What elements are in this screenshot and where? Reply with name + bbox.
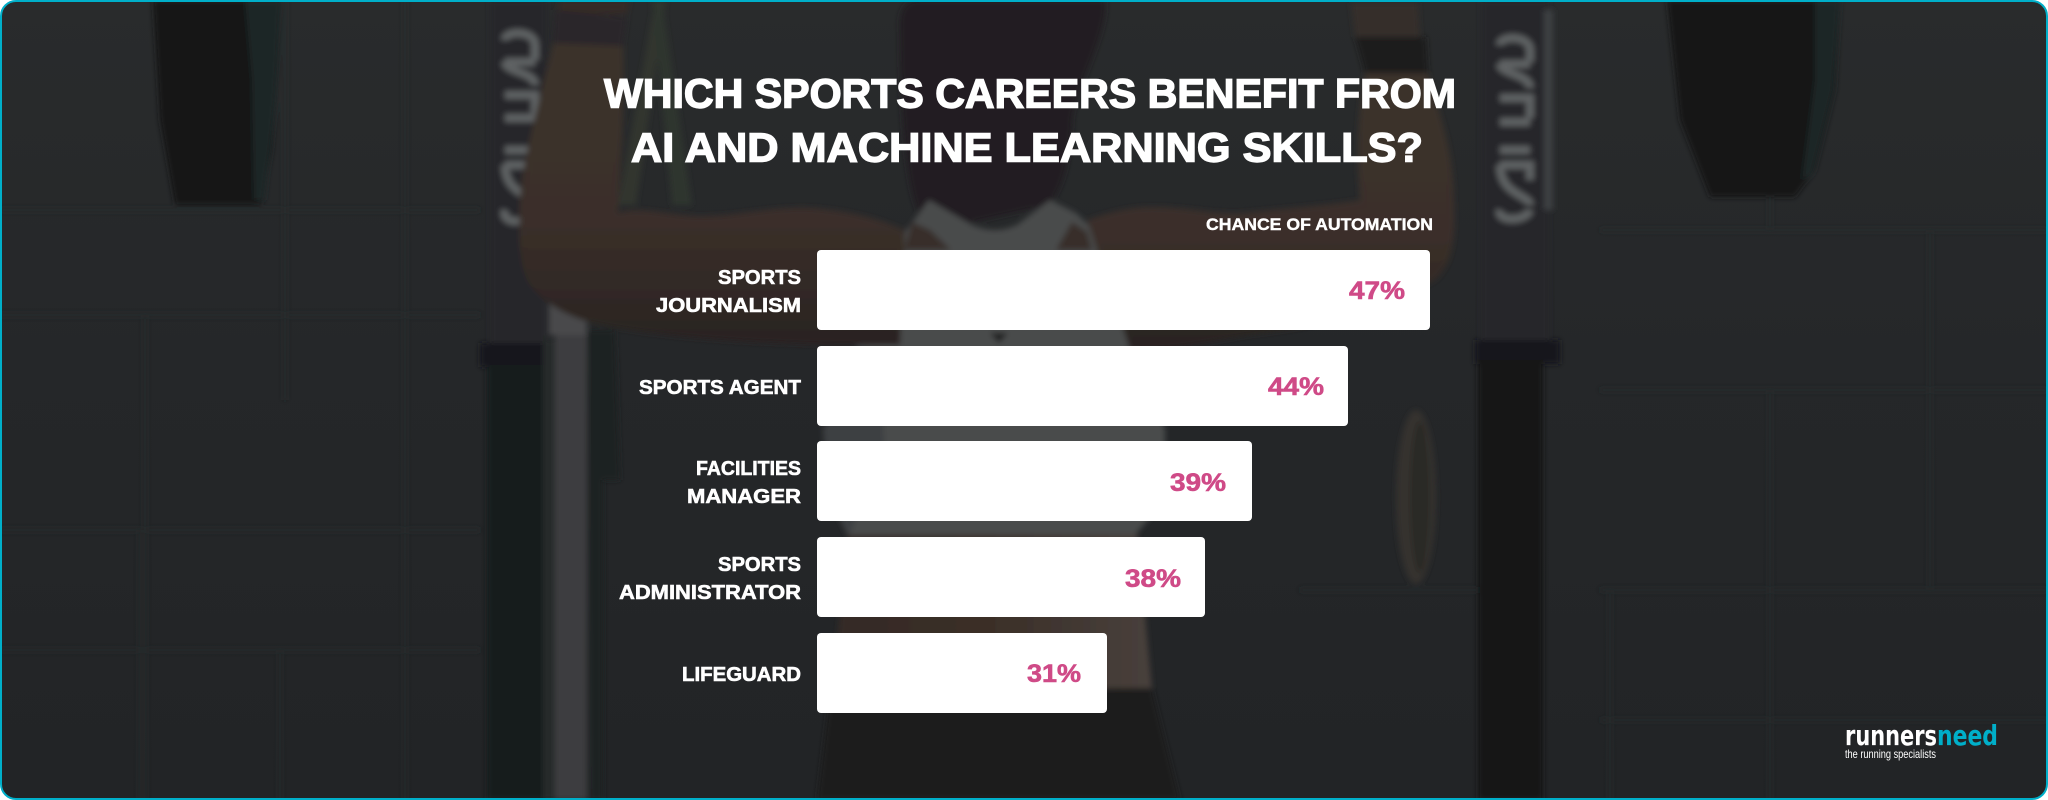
left rack <box>480 0 620 800</box>
bar row: sports agent: 44% <box>1268 373 1324 401</box>
person: shorts <box>817 688 1180 800</box>
person: tank top <box>823 200 1165 535</box>
person: right arm <box>1087 73 1454 350</box>
bar row: sports agent: SPORTS AGENT <box>639 377 801 399</box>
bar row: sports journalism: JOURNALISM <box>656 295 801 317</box>
bar row: lifeguard: LIFEGUARD <box>682 664 801 686</box>
bar row: sports administrator <box>619 537 1205 617</box>
bar row: facilities manager: MANAGER <box>687 486 802 508</box>
right weight plate <box>1667 0 1840 197</box>
bar row: facilities manager <box>687 441 1252 521</box>
bar row: sports administrator: 38% <box>1125 565 1181 593</box>
logo: runnersneed <box>1845 719 1998 761</box>
person: hair <box>900 0 1105 225</box>
bar row: sports agent <box>639 346 1348 426</box>
bar row: sports journalism <box>656 250 1430 330</box>
title: AI AND MACHINE LEARNING SKILLS? <box>631 124 1423 170</box>
bar row: lifeguard <box>682 633 1107 713</box>
axis heading: chance of automation: CHANCE OF AUTOMATION <box>1206 216 1433 234</box>
bar row: lifeguard: 31% <box>1027 660 1081 688</box>
person: hands and wristbands <box>553 0 1428 73</box>
bar row: sports journalism: 47% <box>1349 277 1405 305</box>
bar row: sports administrator: ADMINISTRATOR <box>619 582 802 604</box>
right rack <box>1475 0 1560 800</box>
person: left arm <box>519 43 905 345</box>
gymnastic ring and straps <box>618 0 1436 584</box>
left weight plate <box>153 0 281 205</box>
bar row: facilities manager: 39% <box>1170 469 1226 497</box>
logo: runnersneed: the running specialists <box>1845 747 1936 761</box>
title: WHICH SPORTS CAREERS BENEFIT FROM <box>604 70 1456 116</box>
logo: runnersneed: runners <box>1845 719 1937 752</box>
title <box>604 70 1456 170</box>
bar row: sports administrator: SPORTS <box>718 554 801 576</box>
person: lower torso <box>838 532 1154 692</box>
bar row: facilities manager: FACILITIES <box>696 458 801 480</box>
logo: runnersneed: need <box>1937 719 1998 752</box>
bar row: sports journalism: SPORTS <box>718 267 801 289</box>
